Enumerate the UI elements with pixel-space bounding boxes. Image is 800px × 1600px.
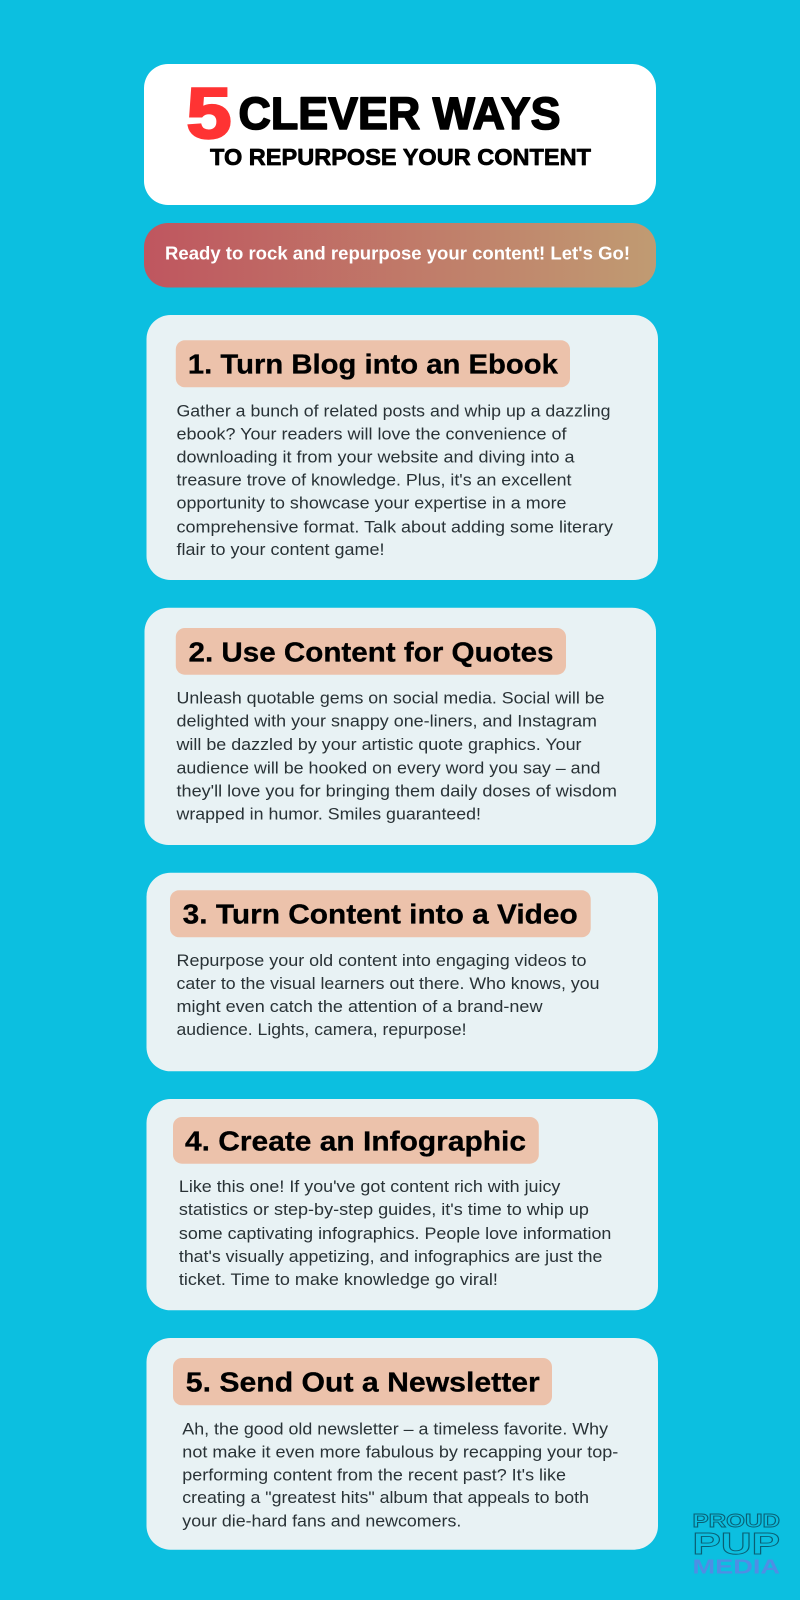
panel: step 1 xyxy=(146,315,658,580)
text: step 4 body: some captivating infographics. People love information xyxy=(179,1224,611,1243)
text: step 1 body: comprehensive format. Talk about adding some literary xyxy=(176,517,614,536)
text: step 5 body: your die-hard fans and newcomers. xyxy=(182,1511,461,1530)
logo: Proud Pup Media: PUP xyxy=(692,1526,780,1561)
heading: step 1 xyxy=(176,340,570,387)
heading: step 5 xyxy=(173,1358,552,1405)
heading: step 4: 4. Create an Infographic xyxy=(185,1125,526,1156)
text: step 4 body: Like this one! If you've got content rich with juicy xyxy=(179,1177,561,1196)
text: step 1 body: Gather a bunch of related posts and whip up a dazzling xyxy=(176,401,610,420)
panel: step 3 xyxy=(146,873,658,1071)
panel: title xyxy=(144,64,656,205)
text: step 1 body: flair to your content game! xyxy=(176,540,384,559)
text: step 4 body: statistics or step-by-step guides, it's time to whip up xyxy=(179,1200,589,1219)
text: step 1 body: ebook? Your readers will love the convenience of xyxy=(176,424,567,443)
text: step 3 body: might even catch the attention of a brand-new xyxy=(176,997,543,1016)
panel: step 2 xyxy=(144,608,656,845)
text: step 5 body: not make it even more fabulous by recapping your top- xyxy=(182,1442,618,1461)
text: step 1 body: treasure trove of knowledge. Plus, it's an excellent xyxy=(176,470,572,489)
heading: step 4 xyxy=(173,1117,539,1164)
text: step 2 body: delighted with your snappy one-liners, and Instagram xyxy=(176,711,597,730)
heading: step 2: 2. Use Content for Quotes xyxy=(188,636,554,667)
text: step 3 body: cater to the visual learners out there. Who knows, you xyxy=(176,974,600,993)
logo: Proud Pup Media: MEDIA xyxy=(692,1556,780,1578)
banner: intro xyxy=(144,223,656,288)
text: step 4 body xyxy=(179,1177,611,1289)
panel: step 4 xyxy=(146,1099,658,1310)
text: step 2 body: wrapped in humor. Smiles guaranteed! xyxy=(175,804,481,823)
text: step 4 body: ticket. Time to make knowledge go viral! xyxy=(179,1270,498,1289)
text: step 1 body: opportunity to showcase your expertise in a more xyxy=(176,493,566,512)
heading: step 1: 1. Turn Blog into an Ebook xyxy=(188,348,558,379)
text: step 5 body: performing content from the recent past? It's like xyxy=(182,1465,566,1484)
text: step 4 body: that's visually appetizing, and infographics are just the xyxy=(179,1247,602,1266)
text: step 5 body xyxy=(182,1419,618,1530)
heading: step 5: 5. Send Out a Newsletter xyxy=(186,1367,540,1398)
text: step 1 body: downloading it from your website and diving into a xyxy=(176,447,575,466)
text: step 3 body xyxy=(176,951,600,1039)
text: step 3 body: Repurpose your old content into engaging videos to xyxy=(176,951,586,970)
logo: Proud Pup Media: PROUD xyxy=(692,1510,780,1531)
text: step 5 body: creating a "greatest hits" album that appeals to both xyxy=(182,1488,589,1507)
text: step 2 body: they'll love you for bringing them daily doses of wisdom xyxy=(176,781,617,800)
heading: step 2 xyxy=(176,628,566,675)
text: step 2 body: Unleash quotable gems on social media. Social will be xyxy=(176,688,604,707)
subtitle: TO REPURPOSE YOUR CONTENT xyxy=(210,144,592,170)
text: step 2 body: audience will be hooked on every word you say – and xyxy=(176,758,600,777)
heading: step 3 xyxy=(170,890,591,937)
text: step 1 body xyxy=(176,401,614,559)
title number 5: 5 xyxy=(186,75,232,154)
text: step 2 body: will be dazzled by your artistic quote graphics. Your xyxy=(175,735,582,754)
banner: intro: Ready to rock and repurpose your content! Let's Go! xyxy=(165,242,630,263)
title: clever ways: CLEVER WAYS xyxy=(238,88,560,139)
text: step 3 body: audience. Lights, camera, repurpose! xyxy=(176,1020,466,1039)
logo: Proud Pup Media xyxy=(692,1510,780,1578)
heading: step 3: 3. Turn Content into a Video xyxy=(183,899,578,930)
panel: step 5 xyxy=(146,1338,658,1550)
text: step 2 body xyxy=(175,688,617,823)
text: step 5 body: Ah, the good old newsletter – a timeless favorite. Why xyxy=(182,1419,609,1438)
